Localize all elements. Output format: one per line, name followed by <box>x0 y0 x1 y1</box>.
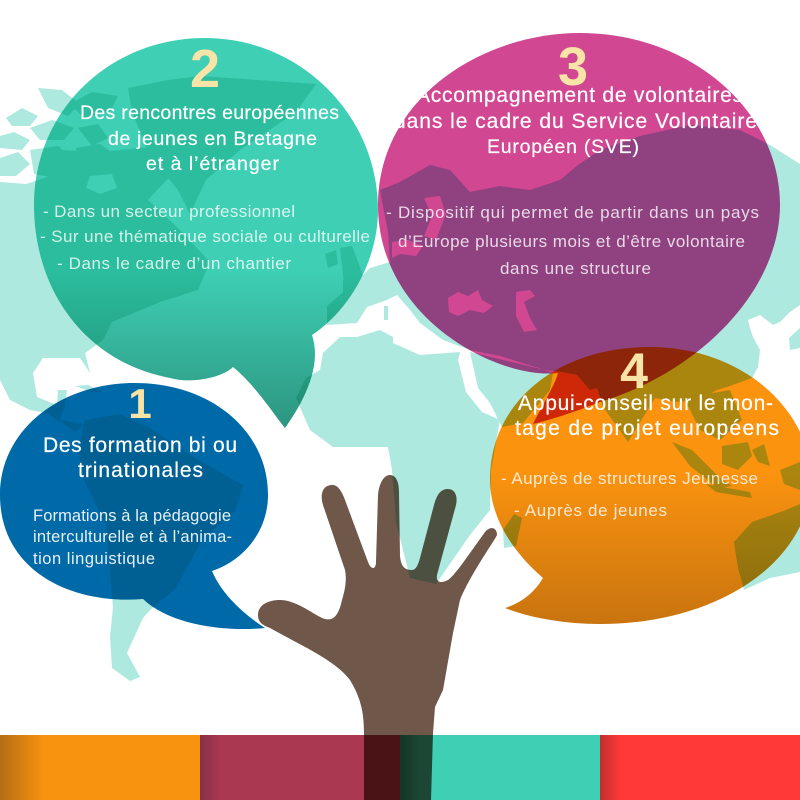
number 4: 4 <box>620 343 648 399</box>
description 1 <box>33 507 232 568</box>
heading 1 <box>43 434 237 482</box>
South America <box>78 414 243 681</box>
world map background <box>0 76 800 681</box>
heading 2 <box>80 102 339 175</box>
Madagascar <box>503 514 522 548</box>
panel: bubble 2 text <box>40 39 370 273</box>
description 3: - Dispositif qui permet de partir dans un pays <box>386 203 759 222</box>
list 2: - Sur une thématique sociale ou culturelle <box>40 227 370 246</box>
heading 4: Appui-conseil sur le mon- <box>518 392 773 415</box>
Arctic islands and Greenland <box>0 76 316 214</box>
list 4 <box>501 469 758 520</box>
heading 2: de jeunes en Bretagne <box>108 128 317 150</box>
heading 4: tage de projet européens <box>515 417 779 440</box>
bubble 4 shape <box>490 347 800 624</box>
description 1: tion linguistique <box>33 550 155 568</box>
list 2: - Dans un secteur professionnel <box>43 202 295 221</box>
description 1: Formations à la pédagogie <box>33 507 231 525</box>
number 3: 3 <box>558 37 588 97</box>
list 4: - Auprès de jeunes <box>514 501 667 520</box>
heading 2: Des rencontres européennes <box>80 102 339 124</box>
heading 3 <box>394 84 757 158</box>
heading 4 <box>515 392 779 440</box>
Australia <box>734 504 800 590</box>
Africa and Arabia <box>296 330 553 584</box>
Eurasia <box>327 125 800 442</box>
list 2: - Dans le cadre d’un chantier <box>57 254 291 273</box>
heading 1: trinationales <box>78 459 203 482</box>
icon: raised hand <box>258 475 497 800</box>
list 2 <box>40 202 370 273</box>
bubble 1 shape <box>0 383 268 629</box>
description 3: dans une structure <box>500 259 651 278</box>
panel: bubble 3 text <box>386 37 759 278</box>
heading 1: Des formation bi ou <box>43 434 237 457</box>
heading 2: et à l’étranger <box>146 153 280 175</box>
description 1: interculturelle et à l’anima- <box>33 528 232 546</box>
number 2: 2 <box>190 39 220 99</box>
panel: bubble 1 text <box>33 380 237 568</box>
bubble 3 shape <box>378 33 780 424</box>
number 1: 1 <box>128 380 152 427</box>
Southeast Asia and Indonesia <box>672 390 800 498</box>
inland seas <box>86 174 537 332</box>
UK and Ireland <box>325 246 365 284</box>
North America <box>0 146 210 432</box>
description 3 <box>386 203 759 278</box>
colour bars <box>0 735 800 800</box>
bubble shapes <box>34 38 378 428</box>
Cuba <box>75 385 102 392</box>
list 4: - Auprès de structures Jeunesse <box>501 469 758 488</box>
bubble 2 shape <box>34 38 378 428</box>
heading 3: Accompagnement de volontaires <box>416 84 743 107</box>
description 3: d’Europe plusieurs mois et d’être volontaire <box>398 232 745 251</box>
Japan <box>789 328 800 350</box>
Italy <box>384 306 388 320</box>
heading 3: dans le cadre du Service Volontaire <box>394 110 757 133</box>
panel: bubble 4 text <box>501 343 779 520</box>
heading 3: Européen (SVE) <box>487 136 639 158</box>
